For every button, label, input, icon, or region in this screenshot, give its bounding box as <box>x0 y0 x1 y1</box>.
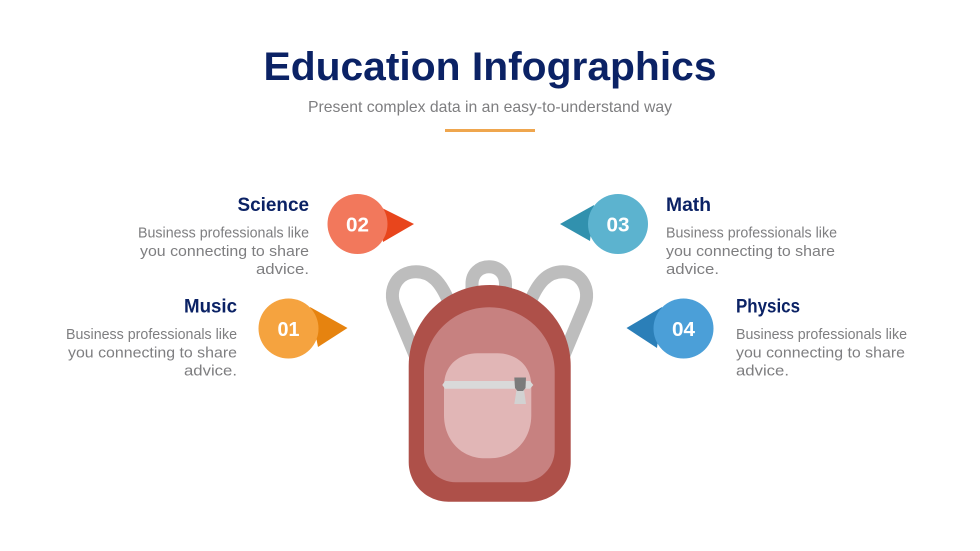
body <box>736 326 907 380</box>
bag inner panel <box>424 307 555 482</box>
body <box>66 326 237 380</box>
body: Business professionals like <box>66 326 237 343</box>
body: Business professionals like <box>666 224 837 242</box>
body: you connecting to share <box>68 344 237 362</box>
body <box>666 224 837 278</box>
heading: Math <box>666 195 711 216</box>
number: 01 <box>278 318 300 341</box>
body: you connecting to share <box>140 243 309 260</box>
body <box>138 224 309 278</box>
number: 03 <box>606 214 630 236</box>
body: you connecting to share <box>666 243 835 260</box>
pointer <box>626 307 662 348</box>
circle <box>588 194 648 254</box>
marker 04 <box>626 298 714 358</box>
pointer <box>560 205 594 241</box>
body: advice. <box>736 362 789 380</box>
title underline <box>445 129 535 132</box>
marker 03 <box>560 194 648 254</box>
pointer <box>310 307 348 347</box>
zipper <box>442 381 533 389</box>
zipper pull <box>514 378 526 391</box>
text block: Math <box>666 195 837 278</box>
subtitle: Present complex data in an easy-to-understand way <box>308 99 672 116</box>
title: Education Infographics <box>264 45 716 89</box>
number: 04 <box>672 318 696 341</box>
heading: Physics <box>736 296 800 318</box>
circle <box>328 194 388 254</box>
marker 02 <box>328 194 414 254</box>
circle <box>258 298 318 358</box>
heading: Science <box>238 195 309 216</box>
body: advice. <box>184 362 237 380</box>
zipper pull tab <box>514 390 526 404</box>
text block: Physics <box>736 296 907 380</box>
text block: Science <box>138 195 309 278</box>
marker 01 <box>258 298 348 358</box>
number: 02 <box>346 214 369 236</box>
pointer <box>378 206 414 242</box>
left strap <box>392 272 449 367</box>
heading: Music <box>184 296 237 318</box>
body: Business professionals like <box>736 326 907 343</box>
front pocket <box>444 353 531 458</box>
text block: Music <box>66 296 237 380</box>
centre handle <box>472 267 506 300</box>
right strap <box>530 272 587 367</box>
body: advice. <box>256 261 309 278</box>
bag body <box>409 285 571 502</box>
circle <box>654 298 714 358</box>
backpack illustration <box>392 267 587 502</box>
body: Business professionals like <box>138 224 309 242</box>
body: advice. <box>666 261 719 278</box>
body: you connecting to share <box>736 344 905 362</box>
